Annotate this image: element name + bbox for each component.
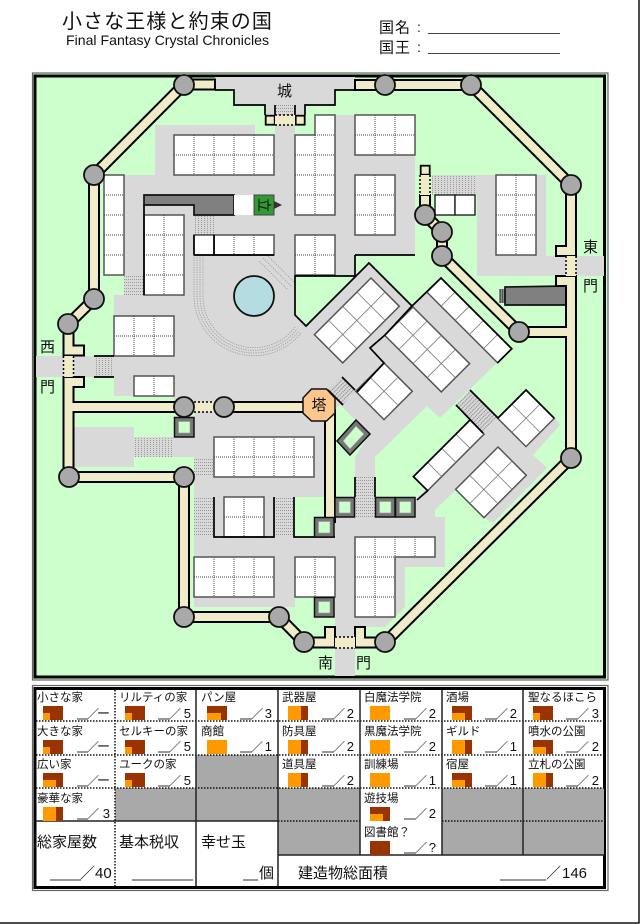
cell: 噴水の公園: 噴水の公園 <box>528 725 586 738</box>
cell: 酒場: 2 <box>510 706 517 721</box>
cell: 聖なるほこら: 聖なるほこら <box>528 691 597 704</box>
total: houses: 40 <box>95 865 112 882</box>
cell: 広い家: ／ <box>87 774 99 788</box>
map frame <box>32 73 608 680</box>
cell: 道具屋: 2 <box>347 773 354 788</box>
total: houses: 総家屋数 <box>37 834 97 851</box>
total: houses: ／ <box>80 865 95 882</box>
cell: 黒魔法学院 <box>364 724 436 754</box>
cell: 白魔法学院: 白魔法学院 <box>364 690 422 704</box>
gates <box>64 115 576 648</box>
cell: ユークの家 <box>119 757 191 788</box>
cell: 道具屋 <box>282 757 354 788</box>
cell: 広い家 <box>37 757 110 788</box>
cell: 聖なるほこら: ／ <box>577 707 589 721</box>
cell: 防具屋: 2 <box>347 739 354 754</box>
buildings: axis aligned <box>104 115 536 617</box>
cell: 黒魔法学院: ／ <box>415 740 427 754</box>
cell: 商館: 1 <box>265 739 272 754</box>
total: houses <box>37 834 112 882</box>
table frame <box>32 686 608 890</box>
unused grey cells <box>115 755 604 855</box>
field: kingdom name: : <box>417 19 421 35</box>
field: kingdom name <box>379 19 560 36</box>
cell: 宿屋: 1 <box>510 773 517 788</box>
panel: building tally <box>32 686 608 890</box>
icon: notice board: 立 <box>256 198 272 212</box>
cell: 豪華な家: ／ <box>87 807 99 821</box>
stairs <box>94 105 498 537</box>
label: east gate <box>583 239 598 295</box>
label: east gate: 東 <box>583 239 598 256</box>
cell: 白魔法学院: ／ <box>415 707 427 721</box>
cell: 訓練場: 1 <box>429 773 436 788</box>
cell: 図書館: 図書館？ <box>364 825 410 839</box>
field: king name <box>379 39 560 56</box>
building: dark hall east <box>499 286 566 305</box>
total: building area: ／ <box>546 865 561 882</box>
cell: 聖なるほこら: 3 <box>592 706 599 721</box>
total: happiness gems: 幸せ玉 <box>201 834 246 851</box>
cell: セルキーの家: 5 <box>184 739 191 754</box>
road edges <box>215 90 355 115</box>
cell: 商館 <box>201 725 272 754</box>
cell: 立札の公園: 立札の公園 <box>528 757 586 771</box>
cell: 大きな家 <box>37 724 110 754</box>
cell: リルティの家: 5 <box>184 706 191 721</box>
cell: パン屋: パン屋 <box>201 691 236 704</box>
panel: town map <box>32 73 608 680</box>
building: dark long hall <box>144 195 234 215</box>
cell: 図書館: ? <box>429 840 436 855</box>
cell: 酒場: 酒場 <box>446 691 469 704</box>
cell: 酒場 <box>446 691 517 721</box>
cell: 酒場: ／ <box>496 707 508 721</box>
cell: ギルド <box>446 725 517 754</box>
label: west gate <box>40 339 55 396</box>
cell: 宿屋: ／ <box>496 774 508 788</box>
cell: 小さな家 <box>37 690 110 721</box>
cell: 黒魔法学院: 2 <box>429 739 436 754</box>
cell: 宿屋: 宿屋 <box>446 757 469 771</box>
label: south gate: 南 <box>318 655 333 672</box>
label: south gate <box>318 655 371 672</box>
garden boxes <box>174 418 415 617</box>
cell: 遊技場: ／ <box>415 807 427 821</box>
cell: 立札の公園: ／ <box>577 774 589 788</box>
label: south gate: 門 <box>356 655 371 672</box>
cell: 白魔法学院: 2 <box>429 706 436 721</box>
cell: 白魔法学院 <box>364 690 436 721</box>
cell: ギルド: ギルド <box>446 725 480 738</box>
cell: 武器屋: ／ <box>333 707 345 721</box>
total: building area <box>298 865 587 882</box>
cell: リルティの家 <box>119 690 191 721</box>
cell: 黒魔法学院: 黒魔法学院 <box>364 724 422 738</box>
cell: 道具屋: 道具屋 <box>282 757 316 771</box>
cell: 広い家: ー <box>97 773 110 788</box>
field: king name: 国王 <box>379 40 411 56</box>
cell: 防具屋: 防具屋 <box>282 724 316 738</box>
cell: ユークの家: 5 <box>184 773 191 788</box>
tower: 塔: 塔 <box>311 397 327 414</box>
cell: 訓練場 <box>364 757 436 788</box>
total: base tax: 基本税収 <box>119 834 179 851</box>
cell: 広い家: 広い家 <box>37 757 72 771</box>
cell: ユークの家: ユークの家 <box>119 757 176 771</box>
cell: 豪華な家: 3 <box>103 806 110 821</box>
cell: 聖なるほこら <box>528 691 599 721</box>
cell: 小さな家: ー <box>97 706 110 721</box>
cell: 豪華な家 <box>37 791 110 821</box>
curved fountain stairs <box>194 255 301 356</box>
cell: 遊技場: 遊技場 <box>364 791 399 805</box>
total: happiness gems <box>201 834 274 882</box>
field: kingdom name: 国名 <box>379 20 411 36</box>
cell: パン屋 <box>201 691 272 721</box>
building: plain hall <box>234 195 254 215</box>
tower: 塔 <box>303 389 335 421</box>
icon: notice board <box>254 195 282 215</box>
cell: 道具屋: ／ <box>333 774 345 788</box>
table grid <box>36 690 604 886</box>
cell: 噴水の公園 <box>528 725 599 754</box>
cell: 武器屋: 武器屋 <box>282 691 316 704</box>
cell: 図書館 <box>364 825 436 855</box>
label: castle: 城 <box>277 83 292 100</box>
cell: 訓練場: ／ <box>415 774 427 788</box>
cell: 大きな家: 大きな家 <box>37 724 83 738</box>
cell: 遊技場 <box>364 791 436 821</box>
wall towers <box>58 75 581 652</box>
cell: リルティの家: ／ <box>169 707 181 721</box>
cell: ギルド: ／ <box>496 740 508 754</box>
label: west gate: 西 <box>40 339 55 356</box>
subtitle: Final Fantasy Crystal Chronicles <box>66 32 269 48</box>
cell: 宿屋 <box>446 757 517 788</box>
title: 小さな王様と約束の国 <box>62 10 273 33</box>
cell: 噴水の公園: 2 <box>592 739 599 754</box>
total: base tax <box>119 834 193 880</box>
cell: 図書館: ／ <box>415 841 427 855</box>
cell: パン屋: 3 <box>265 706 272 721</box>
total: happiness gems: 個 <box>259 865 274 882</box>
cell: 武器屋 <box>282 691 354 721</box>
cell: 訓練場: 訓練場 <box>364 757 399 771</box>
label: east gate: 門 <box>583 278 598 295</box>
cell: 立札の公園 <box>528 757 599 788</box>
cell: 噴水の公園: ／ <box>577 740 589 754</box>
roads <box>36 77 604 676</box>
cell: 遊技場: 2 <box>429 806 436 821</box>
cell: 豪華な家: 豪華な家 <box>37 791 83 805</box>
total: building area: 建造物総面積 <box>298 865 388 882</box>
cell: 大きな家: ー <box>97 739 110 754</box>
fountain <box>234 276 274 316</box>
town walls <box>68 84 571 642</box>
cell: 商館: ／ <box>251 740 263 754</box>
cell: 小さな家: ／ <box>87 707 99 721</box>
cell: ギルド: 1 <box>510 739 517 754</box>
cell: セルキーの家: ／ <box>169 740 181 754</box>
label: west gate: 門 <box>40 379 55 396</box>
cell: 防具屋 <box>282 724 354 754</box>
cell: ユークの家: ／ <box>169 774 181 788</box>
cell: セルキーの家 <box>119 724 191 754</box>
cell: 大きな家: ／ <box>87 740 99 754</box>
cell: 防具屋: ／ <box>333 740 345 754</box>
cell: セルキーの家: セルキーの家 <box>119 724 188 738</box>
buildings: diagonal <box>314 278 554 518</box>
cell: 立札の公園: 2 <box>592 773 599 788</box>
field: king name: : <box>417 39 421 55</box>
cell: リルティの家: リルティの家 <box>119 690 187 704</box>
total: building area: 146 <box>562 865 587 882</box>
cell: パン屋: ／ <box>251 707 263 721</box>
cell: 商館: 商館 <box>201 725 224 738</box>
cell: 武器屋: 2 <box>347 706 354 721</box>
cell: 小さな家: 小さな家 <box>37 690 83 704</box>
